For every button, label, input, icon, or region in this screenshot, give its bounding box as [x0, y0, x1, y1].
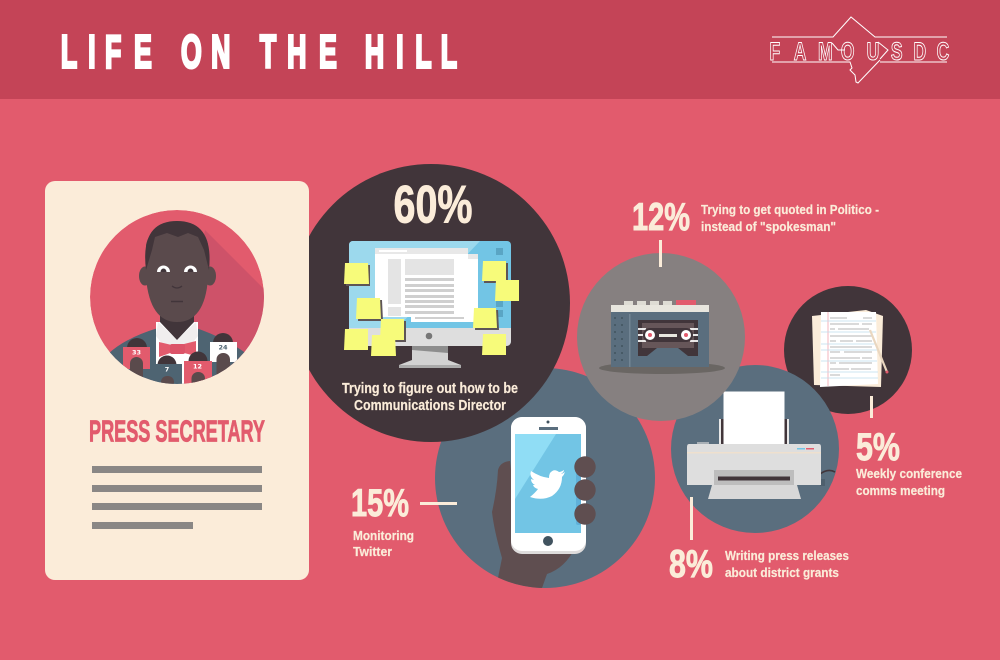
panel: cassette circle [577, 253, 745, 421]
bow tie [159, 341, 196, 357]
panel: twitter circle [435, 368, 655, 588]
stat: 15 percent [351, 482, 457, 559]
title: LIFE [61, 26, 152, 77]
logo: FamousDC [770, 17, 949, 83]
stat: 12 percent [632, 196, 879, 267]
stat: 8 percent: about district grants [725, 565, 839, 580]
stat: 8 percent: 8% [669, 543, 713, 586]
stat: 12 percent: Trying to get quoted in Politico - [701, 202, 879, 217]
icon: papers and pencil [812, 310, 888, 387]
stat: 5 percent: Weekly conference [856, 466, 962, 481]
stat: 15 percent: Monitoring [353, 528, 414, 543]
stat: 12 percent: 12% [632, 196, 690, 239]
role heading: PRESS SECRETARY [89, 414, 265, 448]
caption: Trying to figure out how to be [342, 381, 518, 397]
title: HILL [365, 26, 457, 77]
stat: 5 percent: 5% [856, 426, 900, 469]
logo: FamousDC: FAMOUSDC [770, 37, 949, 66]
icon: cassette player [599, 300, 725, 374]
stat: 8 percent: Writing press releases [725, 548, 849, 563]
stat: 5 percent: comms meeting [856, 483, 945, 498]
portrait: 33 [132, 348, 141, 356]
icon: twitter bird [530, 470, 565, 499]
portrait [90, 210, 266, 392]
microphones [127, 338, 147, 347]
panel: main dark circle: Communications Director [354, 398, 506, 414]
title: THE [260, 26, 337, 77]
stat: 60 percent: 60% [394, 176, 472, 234]
stat: 15 percent: 15% [351, 482, 409, 525]
stat: 5 percent [856, 396, 962, 498]
portrait: 7 [165, 366, 169, 374]
stat: 8 percent [669, 497, 849, 586]
stat: 12 percent: instead of "spokesman" [701, 219, 836, 234]
portrait: 24 [218, 344, 228, 352]
icon: computer with sticky notes [344, 241, 519, 368]
title: ON [181, 26, 230, 77]
icon: printer [687, 392, 835, 499]
panel: main dark circle [292, 164, 570, 442]
stat: 15 percent: Twitter [353, 544, 392, 559]
panel: printer circle [671, 286, 912, 533]
portrait: 12 [193, 362, 202, 370]
icon: hand holding phone [492, 417, 596, 588]
header band [0, 0, 1000, 99]
panel: press secretary card [45, 181, 309, 580]
description placeholder lines [92, 466, 262, 529]
